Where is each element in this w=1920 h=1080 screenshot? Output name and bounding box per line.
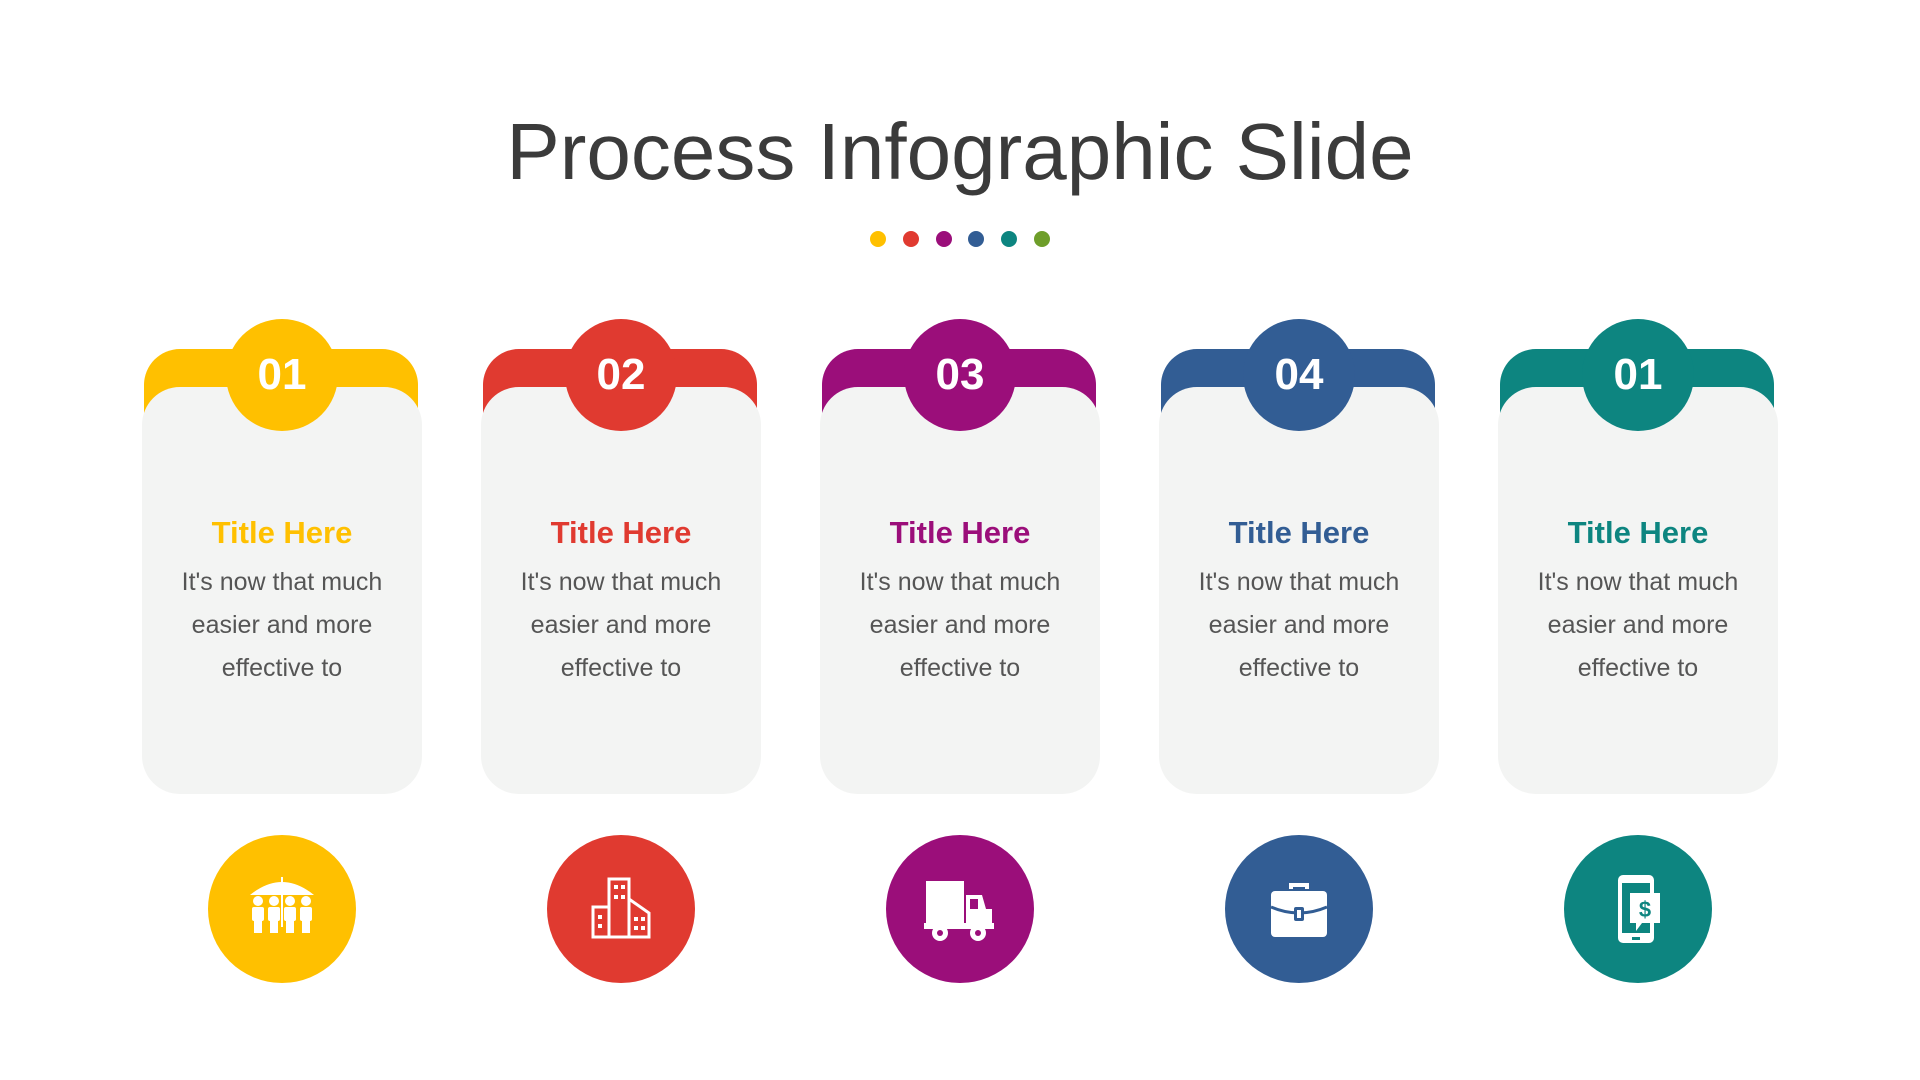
card title: Title Here (1568, 515, 1708, 550)
card title: Title Here (212, 515, 352, 550)
card text: easier and more (1548, 611, 1728, 639)
number badge 03: 03 (936, 350, 984, 399)
card title: Title Here (551, 515, 691, 550)
card text (1199, 568, 1399, 682)
card text: It's now that much (521, 568, 721, 596)
icon: truck (886, 835, 1034, 983)
panel: step 05 (1498, 319, 1778, 794)
card text: effective to (1239, 654, 1359, 682)
card text: easier and more (870, 611, 1050, 639)
panel: step 02 (481, 319, 761, 794)
number badge 01: 01 (258, 350, 306, 399)
card text: easier and more (1209, 611, 1389, 639)
card text: effective to (222, 654, 342, 682)
number badge 02 (565, 319, 677, 431)
icon: people under umbrella (208, 835, 356, 983)
icon: buildings (547, 835, 695, 983)
card title: Title Here (1229, 515, 1369, 550)
icon: mobile payment: $ (1639, 897, 1651, 922)
number badge 04: 04 (1275, 350, 1323, 399)
icon: briefcase (1225, 835, 1373, 983)
panel: step 01 (142, 319, 422, 794)
title: Process Infographic Slide (506, 107, 1414, 196)
card text: It's now that much (1538, 568, 1738, 596)
card text: It's now that much (1199, 568, 1399, 596)
card title: Title Here (890, 515, 1030, 550)
card text: It's now that much (860, 568, 1060, 596)
card text: effective to (561, 654, 681, 682)
card text (860, 568, 1060, 682)
number badge 01 (226, 319, 338, 431)
color dots (870, 231, 1050, 247)
number badge 01: 01 (1614, 350, 1662, 399)
card text: effective to (1578, 654, 1698, 682)
number badge 03 (904, 319, 1016, 431)
panel: step 04 (1159, 319, 1439, 794)
card text: It's now that much (182, 568, 382, 596)
number badge 02: 02 (597, 350, 645, 399)
card text (1538, 568, 1738, 682)
icon: mobile payment (1564, 835, 1712, 983)
card text: easier and more (531, 611, 711, 639)
card text (182, 568, 382, 682)
panel: step 03 (820, 319, 1100, 794)
card text: effective to (900, 654, 1020, 682)
card text: easier and more (192, 611, 372, 639)
card text (521, 568, 721, 682)
number badge 04 (1243, 319, 1355, 431)
number badge 01 (1582, 319, 1694, 431)
